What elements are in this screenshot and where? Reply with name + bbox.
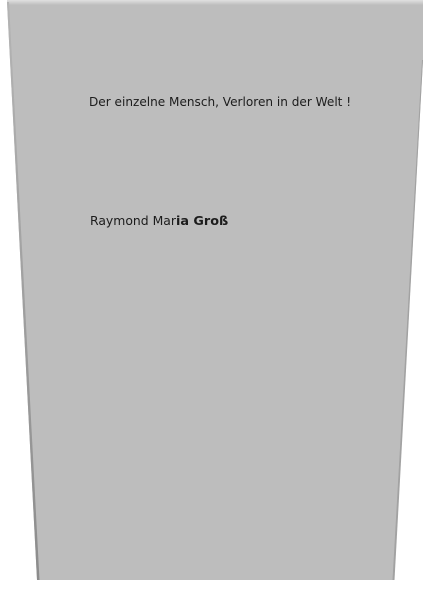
title: Der einzelne Mensch, Verloren in der Welt ! [89,95,351,109]
author name: Raymond Maria Groß [90,213,228,229]
